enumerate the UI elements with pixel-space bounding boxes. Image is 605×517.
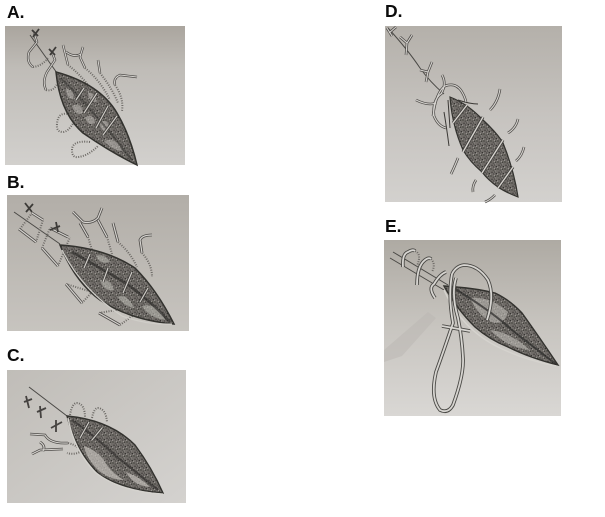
panel D: horizontal suture illustration bbox=[385, 26, 562, 202]
line E bbox=[390, 252, 448, 290]
label: B.: B. bbox=[7, 172, 24, 192]
line A bbox=[30, 35, 57, 73]
label: A.: A. bbox=[7, 2, 24, 22]
wound bbox=[56, 72, 137, 165]
label: D.: D. bbox=[385, 1, 402, 21]
wound bbox=[67, 416, 163, 493]
line B bbox=[14, 212, 60, 244]
wound bbox=[450, 97, 518, 197]
panel C: partially closed wound illustration bbox=[7, 370, 186, 503]
line C bbox=[29, 387, 67, 416]
label: C.: C. bbox=[7, 345, 24, 365]
panel B: vertical mattress suture illustration bbox=[7, 195, 189, 331]
panel A: interrupted suture illustration bbox=[5, 26, 185, 165]
wound bbox=[444, 286, 558, 365]
label: E.: E. bbox=[385, 216, 402, 236]
line D bbox=[388, 28, 444, 94]
panel E: continuous suture illustration bbox=[384, 240, 561, 416]
wound bbox=[60, 245, 174, 324]
